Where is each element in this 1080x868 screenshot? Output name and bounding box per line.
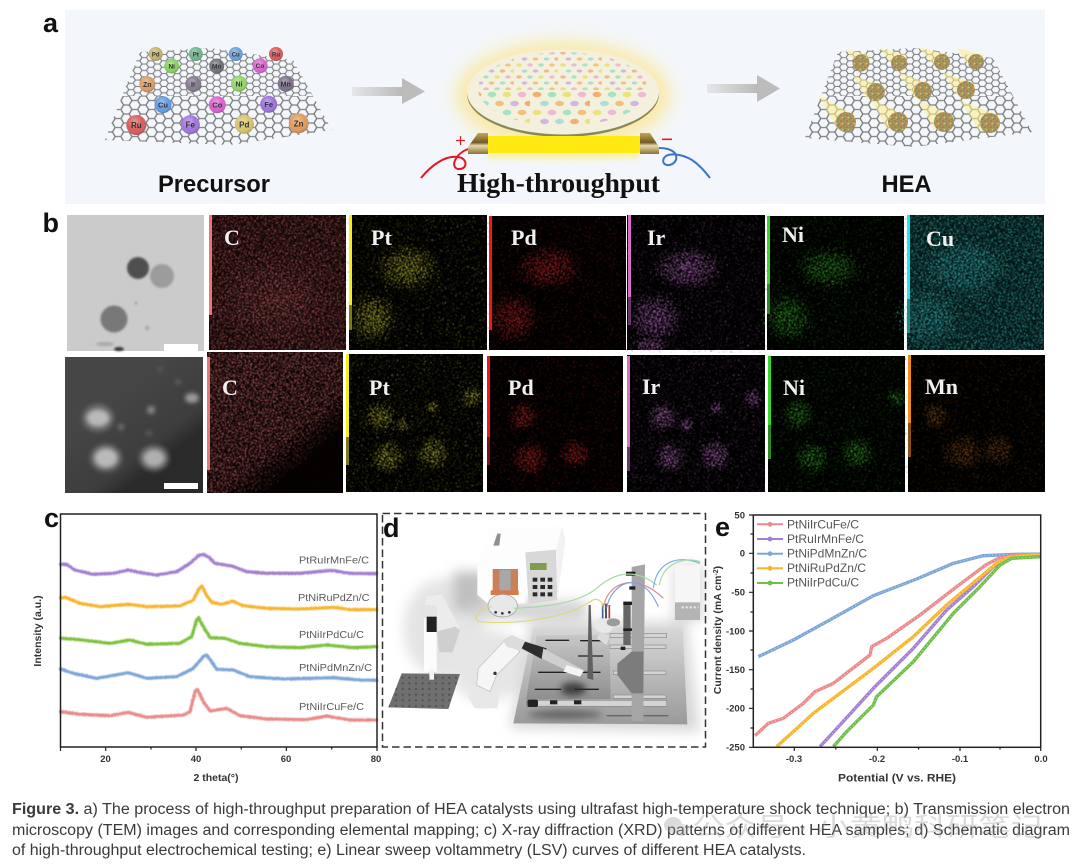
upright divider bbox=[587, 605, 593, 680]
figure caption bbox=[12, 801, 1070, 859]
element label Pd: Pd bbox=[508, 375, 534, 400]
y tick labels: -200 bbox=[726, 704, 745, 714]
panel d: high-throughput electrochemical test setup bbox=[382, 513, 706, 747]
base plate bbox=[513, 628, 687, 724]
dashed frame bbox=[382, 514, 706, 747]
plate slots bbox=[535, 640, 603, 689]
x tick labels: 40 bbox=[191, 754, 201, 765]
graphene sheet: precursor bbox=[105, 48, 332, 145]
metal precursor atoms: Zn bbox=[294, 119, 304, 128]
metal precursor atoms: Ni bbox=[236, 81, 243, 88]
element label C: C bbox=[222, 375, 238, 400]
element label Ni: Ni bbox=[783, 375, 805, 400]
pump head rollers bbox=[491, 569, 519, 595]
x tick labels: -0.2 bbox=[869, 754, 885, 765]
metal precursor atoms: Pd bbox=[239, 120, 250, 129]
element label Pt: Pt bbox=[369, 375, 390, 400]
y tick labels: -50 bbox=[731, 588, 745, 598]
x tick labels: -0.3 bbox=[786, 754, 802, 765]
x tick labels bbox=[786, 754, 1048, 765]
curve: PtNiIrCuFe/C bbox=[61, 689, 377, 720]
peristaltic pump box bbox=[477, 527, 565, 617]
red wire bbox=[421, 149, 468, 178]
map: Pt row 2 bbox=[346, 354, 484, 492]
metal precursor atoms: Cu bbox=[232, 52, 240, 58]
metal precursor atoms: Pt bbox=[193, 52, 199, 58]
y-axis title: ) bbox=[712, 566, 724, 569]
tubing bbox=[476, 560, 700, 622]
black slider parts bbox=[527, 700, 668, 716]
metal precursor atoms: Ru bbox=[272, 52, 280, 58]
y-axis title: Intensity (a.u.) bbox=[32, 595, 44, 667]
watermark chat icon bbox=[664, 817, 689, 836]
arrow: precursor to high-throughput bbox=[352, 78, 425, 104]
metal precursor atoms: Mn bbox=[212, 64, 221, 70]
element label Ir: Ir bbox=[642, 374, 661, 399]
x-axis title: Potential (V vs. RHE) bbox=[838, 772, 956, 784]
scale bar bbox=[164, 344, 198, 351]
curve: PtNiIrPdCu/C bbox=[833, 557, 1040, 747]
carriage block bbox=[617, 652, 643, 693]
element label Ir: Ir bbox=[647, 225, 666, 250]
robot arm 2 bbox=[468, 635, 584, 708]
x tick labels bbox=[100, 754, 381, 765]
tower rail bbox=[623, 602, 631, 645]
y tick labels: -100 bbox=[726, 626, 745, 638]
x tick labels: 0.0 bbox=[1034, 754, 1048, 765]
yellow light beams bbox=[818, 47, 1000, 132]
metal precursor atoms: Mn bbox=[281, 81, 291, 88]
map: Pd row 2 bbox=[487, 356, 623, 492]
curve labels: PtNiPdMnZn/C bbox=[299, 663, 372, 674]
curve labels: PtNiIrCuFe/C bbox=[299, 702, 364, 713]
map: Mn row 2 bbox=[908, 355, 1045, 492]
x tick labels: 20 bbox=[100, 754, 111, 765]
panel a background bbox=[65, 10, 1045, 204]
panel letter b: b bbox=[42, 208, 59, 238]
panel letter d: d bbox=[383, 513, 400, 543]
map: Pt row 1 bbox=[345, 215, 487, 350]
label: High-throughput: High-throughput bbox=[457, 167, 661, 198]
y-axis title: Current density (mA cm bbox=[712, 576, 724, 694]
curve: PtNiIrPdCu/C bbox=[61, 618, 377, 648]
bottom plate shadow bbox=[528, 710, 602, 719]
left electrode bbox=[468, 133, 488, 154]
metal precursor atoms: Fe bbox=[264, 100, 273, 109]
map: C row 2 bbox=[207, 352, 343, 493]
arrow: high-throughput to HEA bbox=[707, 75, 780, 102]
element label C: C bbox=[224, 225, 240, 250]
x tick labels: 60 bbox=[281, 754, 291, 765]
figure caption: microscopy (TEM) images and corresponding elemental mapping; c) X-ray diffraction (XRD) patterns of different HEA samples; d) Schematic diagram bbox=[12, 822, 1070, 839]
map: Ir row 2 bbox=[627, 355, 765, 492]
y tick labels: 50 bbox=[734, 510, 745, 522]
robot arm 1 with dispenser bbox=[424, 594, 460, 680]
metal precursor atoms: Co bbox=[256, 63, 264, 70]
curve labels: PtRuIrMnFe/C bbox=[299, 556, 369, 566]
keypad bbox=[533, 578, 552, 596]
metal precursor atoms: Zn bbox=[143, 82, 152, 89]
y tick labels: -150 bbox=[726, 665, 745, 676]
map: Pd row 1 bbox=[485, 216, 626, 350]
watermark bbox=[664, 812, 1043, 842]
curve labels bbox=[298, 556, 372, 713]
metal precursor atoms: Fe bbox=[186, 121, 196, 130]
blue wire bbox=[659, 148, 710, 178]
electrode rods bbox=[603, 604, 609, 618]
well plate holes bbox=[388, 673, 460, 709]
metal precursor atoms: Pd bbox=[152, 52, 160, 58]
panel letter a: a bbox=[43, 8, 59, 38]
chart frame bbox=[60, 514, 377, 747]
sample wafer with dots bbox=[467, 50, 660, 137]
curve labels: PtNiRuPdZn/C bbox=[298, 593, 370, 604]
legend: PtNiRuPdZn/C bbox=[787, 561, 866, 575]
figure caption: of high-throughput electrochemical testing; e) Linear sweep voltammetry (LSV) curves of different HEA catalysts. bbox=[12, 842, 806, 859]
legend: PtNiIrCuFe/C bbox=[787, 518, 859, 532]
graphene sheet: HEA bbox=[805, 48, 1032, 147]
metal precursor atoms: Ir bbox=[191, 82, 196, 89]
map: Ni row 1 bbox=[760, 216, 904, 350]
curve: PtNiIrCuFe/C bbox=[755, 555, 1040, 736]
soft shadows bbox=[403, 565, 703, 732]
element label Cu: Cu bbox=[926, 226, 954, 251]
tower clamps bbox=[621, 572, 635, 650]
HEA nanoparticles bbox=[836, 54, 1000, 133]
dispenser tip bbox=[429, 668, 434, 680]
curve: PtNiPdMnZn/C bbox=[758, 554, 1040, 657]
x tick labels: 80 bbox=[371, 754, 381, 765]
panel b: TEM and elemental mapping bbox=[42, 208, 1045, 493]
legend bbox=[757, 518, 867, 590]
metal precursor atoms: Co bbox=[212, 100, 223, 110]
curve: PtRuIrMnFe/C bbox=[820, 556, 1040, 747]
sample plate bbox=[526, 634, 611, 700]
XRD curves bbox=[61, 554, 377, 720]
LSV curves bbox=[755, 554, 1040, 747]
map: Cu row 1 bbox=[894, 215, 1044, 350]
element label Ni: Ni bbox=[782, 222, 804, 247]
metal precursor atoms: Cu bbox=[158, 100, 168, 110]
shadow on plate bbox=[561, 682, 586, 696]
label: HEA: HEA bbox=[882, 171, 932, 198]
vertical tower bbox=[632, 564, 645, 721]
y tick labels bbox=[726, 510, 745, 754]
panel e: LSV chart bbox=[712, 510, 1048, 784]
metal precursor atoms bbox=[126, 47, 309, 135]
map: Ni row 2 bbox=[768, 356, 908, 492]
metal precursor atoms: Ru bbox=[131, 121, 142, 130]
legend: PtNiPdMnZn/C bbox=[787, 546, 867, 560]
plus sign bbox=[456, 136, 465, 145]
rail frame bbox=[527, 634, 667, 706]
legend: PtNiIrPdCu/C bbox=[787, 576, 859, 590]
pump bolts bbox=[494, 611, 511, 615]
minus sign bbox=[662, 138, 672, 140]
y tick labels: -250 bbox=[726, 742, 745, 754]
x-axis title: 2 theta(°) bbox=[193, 772, 239, 784]
curve: PtNiPdMnZn/C bbox=[61, 655, 377, 680]
metal precursor atoms: Ni bbox=[168, 64, 175, 70]
panel c: XRD chart bbox=[32, 503, 381, 784]
scale bar bbox=[164, 483, 198, 489]
pump wheel bbox=[488, 594, 517, 617]
figure caption: Figure 3. a) The process of high-throughput preparation of HEA catalysts using ultrafast high-temperature shock technique; b) Transmission electron bbox=[12, 801, 1070, 818]
TEM dark-field image bbox=[65, 357, 203, 493]
label: Precursor: Precursor bbox=[158, 171, 270, 198]
pump display bbox=[530, 563, 547, 570]
x-axis ticks bbox=[60, 747, 377, 751]
element label Pt: Pt bbox=[371, 225, 392, 250]
panel letter e: e bbox=[715, 512, 730, 542]
map: C row 1 bbox=[209, 215, 346, 350]
legend: PtRuIrMnFe/C bbox=[787, 532, 864, 546]
TEM bright-field image bbox=[67, 215, 204, 351]
curve labels: PtNiIrPdCu/C bbox=[299, 630, 364, 641]
electrode holder bbox=[594, 617, 620, 645]
curve: PtNiRuPdZn/C bbox=[777, 554, 1040, 747]
glow around wafer bbox=[457, 43, 669, 147]
chart frame bbox=[753, 515, 1041, 747]
curve: PtNiRuPdZn/C bbox=[61, 586, 377, 610]
axis ticks bbox=[749, 515, 1041, 751]
panel a: synthesis process bbox=[43, 8, 1045, 204]
map: Ir row 1 bbox=[625, 215, 765, 353]
right electrode bbox=[640, 133, 659, 154]
element label Mn: Mn bbox=[925, 374, 958, 399]
well plate bbox=[388, 673, 460, 709]
element label Pd: Pd bbox=[511, 225, 537, 250]
x tick labels: -0.1 bbox=[952, 754, 969, 765]
y-axis title: -2 bbox=[713, 569, 720, 576]
watermark text: 公众号 · 小黄鸭科研笔记 bbox=[692, 812, 1043, 842]
panel letter c: c bbox=[44, 503, 59, 533]
y tick labels: 0 bbox=[740, 548, 745, 560]
illustration of robotic setup bbox=[388, 527, 703, 732]
heater strip bbox=[484, 136, 644, 159]
potentiostat box bbox=[675, 565, 700, 620]
curve: PtRuIrMnFe/C bbox=[61, 554, 377, 575]
